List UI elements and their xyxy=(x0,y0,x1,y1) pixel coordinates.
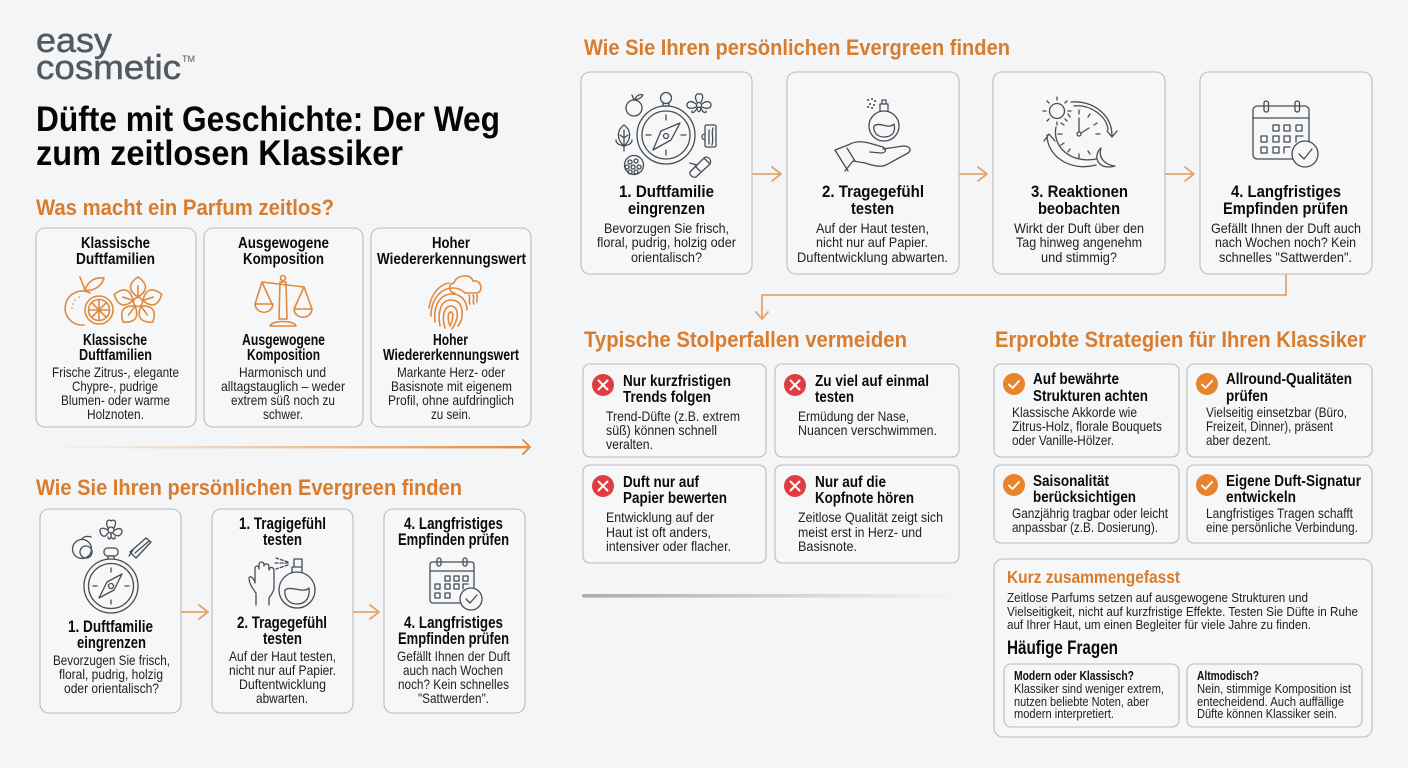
step title: 1. Duftfamilie xyxy=(619,182,714,201)
panel: summary and FAQ xyxy=(994,559,1372,737)
item title: Nur kurzfristigen xyxy=(623,373,731,390)
step title: 1. Duftfamilie xyxy=(68,617,153,636)
heading: was macht ein Parfum zeitlos: Was macht ein Parfum zeitlos? xyxy=(36,195,334,220)
step text xyxy=(1211,220,1361,265)
panel: strategy 2 xyxy=(1187,364,1372,457)
step text xyxy=(1014,220,1144,265)
step title: 3. Reaktionen xyxy=(1031,182,1128,201)
step text: Gefällt Ihnen der Duft xyxy=(397,648,510,664)
step title: Empfinden prüfen xyxy=(1223,199,1348,218)
item title: Kopfnote hören xyxy=(815,490,914,507)
arrow: connector xyxy=(756,275,1286,319)
icon: compass with scent families xyxy=(616,92,716,177)
step heading: 4. Langfristiges xyxy=(404,514,503,533)
item title: Eigene Duft-Signatur xyxy=(1226,473,1361,490)
item title xyxy=(623,474,727,507)
step text: auch nach Wochen xyxy=(403,662,503,678)
item title: Allround-Qualitäten xyxy=(1226,371,1352,388)
step title: eingrenzen xyxy=(628,199,705,218)
item title: berücksichtigen xyxy=(1033,489,1136,506)
item text: Haut ist oft anders, xyxy=(606,524,711,540)
step text: Gefällt Ihnen der Duft auch xyxy=(1211,220,1361,236)
item title xyxy=(815,373,929,406)
step subheading xyxy=(237,613,327,648)
title: zum zeitlosen Klassiker xyxy=(36,134,403,173)
item text xyxy=(1206,505,1358,535)
item text: Ganzjährig tragbar oder leicht xyxy=(1012,505,1168,521)
item title: Saisonalität xyxy=(1033,473,1110,490)
FAQ: modern oder klassisch: modern interpretiert. xyxy=(1014,706,1114,721)
step subheading: 2. Tragegefühl xyxy=(237,613,327,632)
item text xyxy=(1012,404,1162,448)
card heading: Duftfamilien xyxy=(76,251,155,268)
item text xyxy=(798,408,937,438)
logo: easy xyxy=(36,22,112,60)
card text: Chypre-, pudrige xyxy=(72,378,158,394)
panel: step 4 right xyxy=(1200,72,1372,274)
title xyxy=(36,100,500,173)
step text: noch? Kein schnelles xyxy=(398,676,509,692)
panel: strategy 3 xyxy=(994,465,1179,543)
panel: strategy 1 xyxy=(994,364,1179,457)
item text xyxy=(606,509,731,554)
step text: Duftentwicklung xyxy=(239,676,326,692)
step title: 4. Langfristiges xyxy=(1231,182,1341,201)
card heading xyxy=(76,235,155,268)
step text xyxy=(229,648,336,706)
item title: Zu viel auf einmal xyxy=(815,373,929,390)
step text: Bevorzugen Sie frisch, xyxy=(53,652,170,668)
step heading xyxy=(398,514,509,549)
item title: entwickeln xyxy=(1226,489,1296,506)
item text: intensiver oder flacher. xyxy=(606,538,731,554)
arrow: step 1 to 2 left xyxy=(182,605,208,619)
item text: süß) können schnell xyxy=(606,422,717,438)
item text: eine persönliche Verbindung. xyxy=(1206,519,1358,535)
icon: red cross xyxy=(784,374,806,396)
card subheading xyxy=(242,332,325,364)
heading: evergreen finden right: Wie Sie Ihren persönlichen Evergreen finden xyxy=(584,35,1010,60)
item title: Auf bewährte xyxy=(1033,371,1119,388)
item title xyxy=(1033,473,1136,506)
step title xyxy=(1031,182,1128,218)
step text: "Sattwerden". xyxy=(418,690,489,706)
summary text: Zeitlose Parfums setzen auf ausgewogene Strukturen und xyxy=(1007,590,1308,605)
card text: extrem süß noch zu xyxy=(231,392,335,408)
card text xyxy=(388,364,514,422)
panel: pitfall 3 xyxy=(583,465,766,563)
title: Düfte mit Geschichte: Der Weg xyxy=(36,100,500,139)
panel: step 2 left xyxy=(212,509,353,713)
step heading xyxy=(239,514,326,549)
icon: fingerprint and cloud xyxy=(429,276,481,329)
icon: compass with citrus, flower, wood xyxy=(72,520,151,613)
FAQ: modern oder klassisch: Modern oder Klassisch? xyxy=(1014,668,1134,683)
item text: Entwicklung auf der xyxy=(606,509,714,525)
item text: Klassische Akkorde wie xyxy=(1012,404,1137,420)
step text xyxy=(397,648,510,706)
card heading: Wiedererkennungswert xyxy=(377,251,527,268)
icon: citrus and flower xyxy=(65,277,164,327)
item text: Langfristiges Tragen schafft xyxy=(1206,505,1353,521)
step text: orientalisch? xyxy=(631,249,702,265)
card text xyxy=(52,364,179,422)
step text xyxy=(597,220,736,265)
icon: perfume on hand xyxy=(835,99,910,171)
icon: red cross xyxy=(592,374,614,396)
item text xyxy=(1206,404,1347,448)
item title xyxy=(1033,371,1148,405)
icon: scales xyxy=(255,276,312,326)
FAQ: altmodisch: Nein, stimmige Komposition ist xyxy=(1197,681,1351,696)
step text: schnelles "Sattwerden". xyxy=(1219,249,1352,265)
step subheading: Empfinden prüfen xyxy=(398,629,509,648)
panel: strategy 4 xyxy=(1187,465,1372,543)
panel: step 1 left xyxy=(40,509,181,713)
card text: Harmonisch und xyxy=(239,364,326,380)
item title: Duft nur auf xyxy=(623,474,700,491)
step heading: 1. Tragigefühl xyxy=(239,514,326,533)
panel: step 1 right xyxy=(581,72,752,274)
icon: orange check xyxy=(1196,474,1218,496)
item text: Basisnote. xyxy=(798,538,857,554)
step text: nicht nur auf Papier. xyxy=(816,234,928,250)
step title: beobachten xyxy=(1038,199,1120,218)
arrow: step 3 to 4 right xyxy=(1166,167,1194,181)
FAQ: altmodisch: Altmodisch? xyxy=(1197,668,1259,683)
icon: orange check xyxy=(1003,373,1025,395)
step heading: testen xyxy=(263,530,302,549)
card subheading: Hoher xyxy=(433,332,468,349)
item title: Trends folgen xyxy=(623,389,711,406)
item text: meist erst in Herz- und xyxy=(798,524,922,540)
item text xyxy=(798,509,943,554)
icon: calendar with check xyxy=(1253,101,1318,167)
grey fading bar xyxy=(582,594,960,598)
card subheading: Komposition xyxy=(247,347,320,364)
item title xyxy=(1226,371,1352,405)
item text: Zitrus-Holz, florale Bouquets xyxy=(1012,418,1162,434)
panel: step 3 right xyxy=(993,72,1165,274)
step text: Bevorzugen Sie frisch, xyxy=(604,220,729,236)
card heading: Ausgewogene xyxy=(238,235,329,252)
card subheading: Klassische xyxy=(83,332,147,349)
panel: ausgewogene Komposition xyxy=(204,228,363,427)
card text: Holznoten. xyxy=(87,406,144,422)
panel: pitfall 2 xyxy=(775,364,959,457)
logo: cosmetic xyxy=(36,49,181,87)
card text: Basisnote mit eigenem xyxy=(391,378,512,394)
item text: Zeitlose Qualität zeigt sich xyxy=(798,509,943,525)
card heading xyxy=(238,235,329,268)
step title xyxy=(619,182,714,218)
card heading: Hoher xyxy=(432,235,470,252)
step text: Tag hinweg angenehm xyxy=(1016,234,1142,250)
card text: Markante Herz- oder xyxy=(397,364,505,380)
card subheading: Wiedererkennungswert xyxy=(383,347,520,364)
card subheading xyxy=(79,332,152,364)
icon: red cross xyxy=(592,475,614,497)
panel: pitfall 1 xyxy=(583,364,766,457)
step text: floral, pudrig, holzig xyxy=(59,666,163,682)
card text: schwer. xyxy=(263,406,303,422)
item title xyxy=(1226,473,1361,506)
step title xyxy=(68,617,153,652)
item text xyxy=(606,408,740,452)
card text: zu sein. xyxy=(431,406,471,422)
panel: pitfall 4 xyxy=(775,465,959,563)
card subheading xyxy=(383,332,520,364)
heading: evergreen finden left: Wie Sie Ihren persönlichen Evergreen finden xyxy=(36,475,462,500)
item title: testen xyxy=(815,389,854,406)
card subheading: Ausgewogene xyxy=(242,332,325,349)
step text: Auf der Haut testen, xyxy=(816,220,929,236)
item text: Nuancen verschwimmen. xyxy=(798,422,937,438)
panel: step 2 right xyxy=(787,72,959,274)
FAQ: altmodisch: entecheidend. Auch auffällige xyxy=(1197,694,1344,709)
item text: Vielseitig einsetzbar (Büro, xyxy=(1206,404,1347,420)
FAQ: modern oder klassisch: nutzen beliebte Noten, aber xyxy=(1014,694,1150,709)
card heading xyxy=(377,235,527,268)
step text: Auf der Haut testen, xyxy=(229,648,336,664)
card heading: Komposition xyxy=(243,251,324,268)
step title xyxy=(822,182,924,218)
step title: eingrenzen xyxy=(77,633,146,652)
arrow: step 2 to 4 left xyxy=(354,605,379,619)
icon: clock with sun and moon xyxy=(1043,97,1117,167)
icon: orange check xyxy=(1003,474,1025,496)
arrow: step 2 to 3 right xyxy=(960,167,987,181)
card subheading: Duftfamilien xyxy=(79,347,152,364)
panel: hoher Wiedererkennungswert xyxy=(371,228,531,427)
item title: Nur auf die xyxy=(815,474,886,491)
item text: anpassbar (z.B. Dosierung). xyxy=(1012,519,1158,535)
FAQ: altmodisch xyxy=(1187,664,1362,727)
summary text: Vielseitigkeit, nicht auf kurzfristige Effekte. Testen Sie Düfte in Ruhe xyxy=(1007,604,1358,619)
step subheading: 4. Langfristiges xyxy=(404,613,503,632)
step subheading: testen xyxy=(263,629,302,648)
FAQ heading: Häufige Fragen xyxy=(1007,638,1118,659)
step subheading xyxy=(398,613,509,648)
item title xyxy=(623,373,731,406)
step text: oder orientalisch? xyxy=(64,680,159,696)
summary heading: Kurz zusammengefasst xyxy=(1007,567,1180,587)
icon: red cross xyxy=(784,475,806,497)
step text xyxy=(797,220,948,265)
step text: Duftentwicklung abwarten. xyxy=(797,249,948,265)
heading: Stolperfallen: Typische Stolperfallen vermeiden xyxy=(584,327,907,352)
item text: Trend-Düfte (z.B. extrem xyxy=(606,408,740,424)
FAQ: modern oder klassisch: Klassiker sind weniger extrem, xyxy=(1014,681,1164,696)
item title: prüfen xyxy=(1226,388,1268,405)
item title: Strukturen achten xyxy=(1033,388,1148,405)
FAQ: altmodisch: Düfte können Klassiker sein. xyxy=(1197,706,1337,721)
step text: abwarten. xyxy=(256,690,308,706)
item title: Papier bewerten xyxy=(623,490,727,507)
FAQ: modern oder klassisch xyxy=(1004,664,1179,727)
item text: veralten. xyxy=(606,436,653,452)
card text: Blumen- oder warme xyxy=(61,392,170,408)
item text: Freizeit, Dinner), präsent xyxy=(1206,418,1333,434)
logo xyxy=(36,22,195,87)
item text: aber dezent. xyxy=(1206,432,1271,448)
icon: hand and perfume bottle xyxy=(249,558,315,608)
step text: und stimmig? xyxy=(1041,249,1117,265)
step title: 2. Tragegefühl xyxy=(822,182,924,201)
step text: Wirkt der Duft über den xyxy=(1014,220,1144,236)
step text xyxy=(53,652,170,696)
panel: klassische Duftfamilien xyxy=(36,228,196,427)
item text: oder Vanille-Hölzer. xyxy=(1012,432,1114,448)
heading: Strategien: Erprobte Strategien für Ihren Klassiker xyxy=(995,327,1366,352)
icon: calendar with check xyxy=(430,558,482,610)
summary text: auf Ihrer Haut, um einen Begleiter für viele Jahre zu finden. xyxy=(1007,617,1311,632)
step title: testen xyxy=(851,199,894,218)
summary text xyxy=(1007,590,1358,632)
arrow: timeline xyxy=(45,440,530,454)
item text xyxy=(1012,505,1168,535)
icon: orange check xyxy=(1196,373,1218,395)
logo: TM xyxy=(182,54,195,64)
card text: Profil, ohne aufdringlich xyxy=(388,392,514,408)
card text: alltagstauglich – weder xyxy=(221,378,345,394)
card text: Frische Zitrus-, elegante xyxy=(52,364,179,380)
arrow: step 1 to 2 right xyxy=(753,167,781,181)
card heading: Klassische xyxy=(81,235,150,252)
step text: nicht nur auf Papier. xyxy=(229,662,336,678)
step heading: Empfinden prüfen xyxy=(398,530,509,549)
step text: floral, pudrig, holzig oder xyxy=(597,234,736,250)
panel: step 4 left xyxy=(384,509,525,713)
item title xyxy=(815,474,914,507)
item text: Ermüdung der Nase, xyxy=(798,408,909,424)
step title xyxy=(1223,182,1348,218)
card text xyxy=(221,364,345,422)
step text: nach Wochen noch? Kein xyxy=(1215,234,1356,250)
